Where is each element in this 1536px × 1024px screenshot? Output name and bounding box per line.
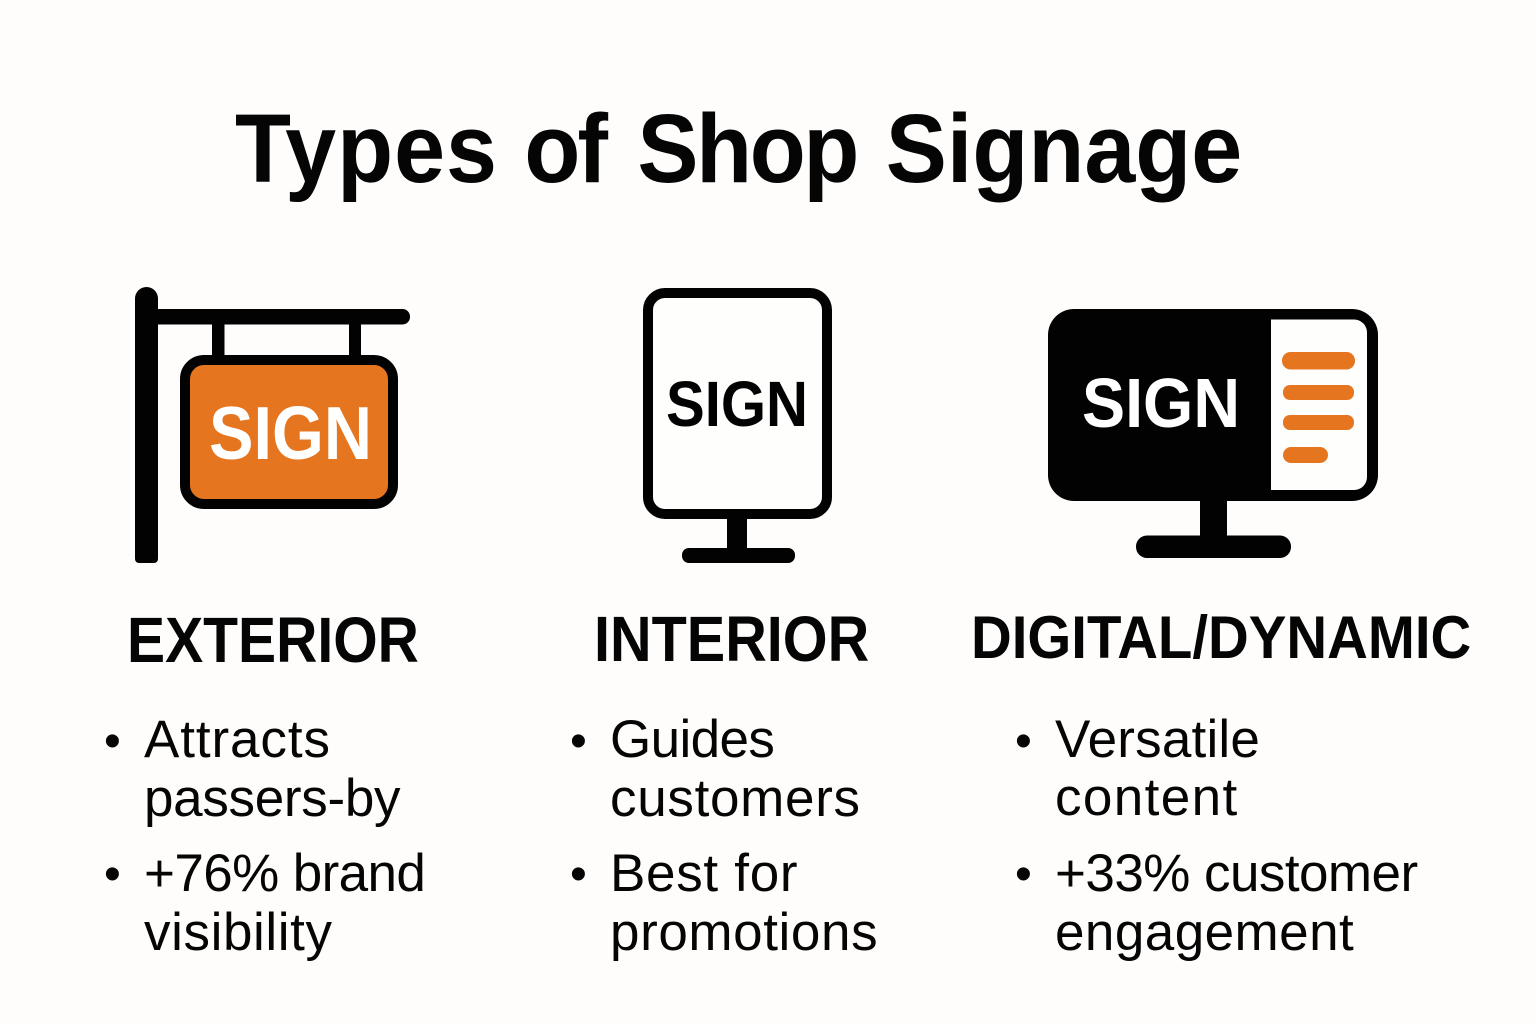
- heading: digital/dynamic: DIGITAL/DYNAMIC: [971, 604, 1471, 671]
- heading: exterior: EXTERIOR: [127, 604, 419, 676]
- heading: interior: INTERIOR: [594, 603, 869, 675]
- title: Types of Shop Signage: [235, 94, 1242, 203]
- text block: interior bullets: Best for: [610, 844, 798, 903]
- text block: exterior bullets: •: [104, 715, 121, 768]
- icon: digital screen sign: SIGN: [1082, 364, 1240, 442]
- icon: interior sign: [643, 288, 832, 563]
- text block: digital bullets: content: [1055, 768, 1239, 827]
- text block: interior bullets: [570, 710, 878, 962]
- text block: interior bullets: promotions: [610, 903, 878, 962]
- text block: exterior bullets: [104, 710, 425, 962]
- text block: interior bullets: Guides: [610, 710, 774, 769]
- text block: digital bullets: Versatile: [1055, 710, 1260, 769]
- text block: exterior bullets: passers-by: [144, 769, 400, 828]
- text block: interior bullets: •: [570, 715, 587, 768]
- text block: exterior bullets: •: [104, 848, 121, 901]
- text block: exterior bullets: visibility: [144, 903, 333, 962]
- text block: digital bullets: •: [1015, 715, 1032, 768]
- icon: exterior hanging sign: [135, 287, 410, 563]
- text block: digital bullets: +33% customer: [1055, 844, 1418, 903]
- text block: exterior bullets: Attracts: [144, 710, 331, 769]
- icon: exterior hanging sign: SIGN: [209, 391, 372, 475]
- text block: digital bullets: [1015, 710, 1418, 962]
- text block: interior bullets: •: [570, 848, 587, 901]
- icon: interior sign: SIGN: [666, 368, 808, 440]
- text block: exterior bullets: +76% brand: [144, 844, 425, 903]
- text block: interior bullets: customers: [610, 769, 861, 828]
- text block: digital bullets: engagement: [1055, 903, 1354, 962]
- icon: digital screen sign: [1048, 309, 1378, 558]
- text block: digital bullets: •: [1015, 848, 1032, 901]
